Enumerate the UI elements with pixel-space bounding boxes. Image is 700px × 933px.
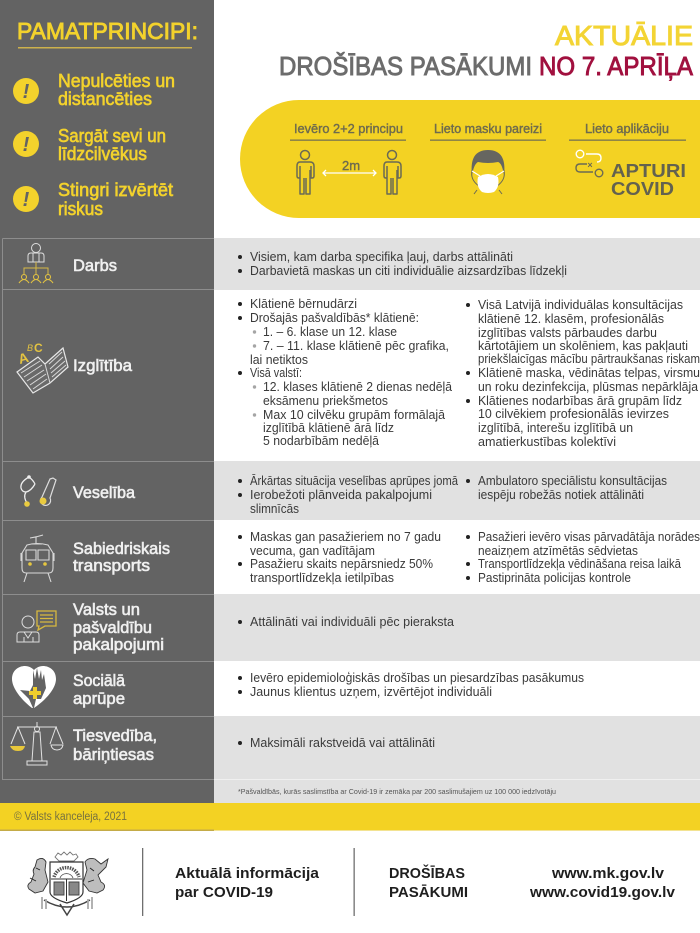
- heading: pamatprincipi: PAMATPRINCIPI:: [17, 18, 198, 44]
- row: izglitiba: lai netiktos: [250, 352, 308, 367]
- principle 1: distancēties: [58, 89, 152, 109]
- text: current information: Aktuālā informācija: [175, 865, 320, 882]
- principle 1: [13, 71, 175, 109]
- row: sabiedriskais transports: transports: [73, 557, 150, 575]
- principle 1: Nepulcēties un: [58, 71, 175, 91]
- rule: mask: [430, 122, 546, 194]
- title: [279, 20, 693, 81]
- text: safety measures: DROŠĪBAS: [389, 864, 465, 882]
- row: izglitiba: eksāmenu priekšmetos: [263, 393, 388, 408]
- row: sociala aprupe: [12, 666, 584, 708]
- principle 3: Stingri izvērtēt: [58, 180, 173, 200]
- row: valsts un pasvaldibu pakalpojumi: Attālināti vai individuāli pēc pieraksta: [250, 614, 455, 629]
- row: sabiedriskais transports: Maskas gan pasažieriem no 7 gadu: [250, 529, 441, 544]
- rule: 2+2: Ievēro 2+2 principu: [294, 122, 403, 136]
- row: izglitiba: Drošajās pašvaldībās* klātienē:: [250, 310, 419, 325]
- row: sabiedriskais transports: Sabiedriskais: [73, 540, 170, 558]
- yellow copyright band: © Valsts kanceleja, 2021: [14, 811, 127, 823]
- row: sociala aprupe: Jaunus klientus uzņem, izvērtējot individuāli: [250, 684, 492, 699]
- row: izglitiba: Klātienes nodarbības ārā grupām līdz: [478, 393, 682, 408]
- row: sabiedriskais transports: Pasažieru skaits nepārsniedz 50%: [250, 556, 433, 571]
- footer: [28, 848, 676, 916]
- icon: heart with hand: [12, 666, 56, 708]
- title: DROŠĪBAS PASĀKUMI: [279, 52, 532, 81]
- row: sabiedriskais transports: transportlīdzekļa ietilpības: [250, 570, 394, 585]
- icon: coat of arms of Latvia: [28, 852, 108, 915]
- row: darbs: Visiem, kam darba specifika ļauj, darbs attālināti: [250, 249, 513, 264]
- row: veseliba: Ārkārtas situācija veselības aprūpes jomā: [250, 473, 459, 488]
- table grid lines: [2, 238, 700, 780]
- rule: 2+2: [290, 122, 406, 194]
- row: darbs: Darbs: [73, 257, 117, 275]
- principle 2: [13, 126, 166, 164]
- row: tiesvediba, barintiesas: Tiesvedība,: [73, 727, 157, 745]
- divider: [354, 848, 355, 916]
- row: tiesvediba, barintiesas: [10, 722, 435, 765]
- icon: scales: [10, 722, 63, 765]
- row: sociala aprupe: Sociālā: [73, 672, 126, 690]
- panel: yellow pill with rules: [240, 100, 700, 218]
- icon: person left: [297, 150, 314, 194]
- underline: [18, 47, 192, 48]
- row: izglitiba: 10 cilvēkiem profesionālās ievirzes: [478, 406, 669, 421]
- principle 3: riskus: [58, 199, 103, 219]
- row: darbs: [19, 244, 567, 283]
- title: AKTUĀLIE: [555, 20, 693, 51]
- row: veseliba: slimnīcās: [250, 501, 299, 516]
- icon: person with speech bubble: [17, 611, 56, 642]
- icon: open book: A: [16, 349, 30, 367]
- icon: apturi covid route: ×: [587, 160, 593, 170]
- row: darbs: Darbavietā maskas un citi individuālie aizsardzības līdzekļi: [250, 263, 567, 278]
- rule: app: Lieto aplikāciju: [585, 122, 669, 136]
- principle 2: !: [23, 134, 30, 156]
- logo text: apturi covid: APTURI: [611, 161, 686, 181]
- row: sociala aprupe: Ievēro epidemioloģiskās drošības un piesardzības pasākumus: [250, 670, 584, 685]
- row: izglitiba: Visā valstī:: [250, 365, 302, 380]
- text: websites: www.mk.gov.lv: [551, 865, 665, 882]
- row: tiesvediba, barintiesas: Maksimāli rakstveidā vai attālināti: [250, 735, 435, 750]
- row: valsts un pasvaldibu pakalpojumi: pašvaldību: [73, 619, 152, 637]
- row: valsts un pasvaldibu pakalpojumi: Valsts un: [73, 601, 140, 619]
- row: sabiedriskais transports: Pastiprināta policijas kontrole: [478, 570, 631, 585]
- row: sociala aprupe: aprūpe: [73, 690, 125, 708]
- logo text: apturi covid: [611, 161, 686, 199]
- principle 3: [13, 180, 173, 219]
- yellow copyright band: [0, 803, 700, 831]
- right row backgrounds: [214, 238, 700, 803]
- row: izglitiba: Klātienē bērnudārzi: [250, 296, 357, 311]
- row: izglitiba: Izglītība: [73, 357, 133, 375]
- text: safety measures: [389, 864, 468, 901]
- row: valsts un pasvaldibu pakalpojumi: [17, 601, 455, 654]
- row: veseliba: [21, 473, 667, 516]
- row: sabiedriskais transports: vecuma, gan vadītājam: [250, 543, 375, 558]
- icon: tram: [21, 535, 54, 582]
- row: izglitiba: amatierkustības kolektīvi: [478, 434, 616, 449]
- icon: stethoscope and thermometer: [21, 475, 56, 507]
- row: izglitiba: 7. – 11. klase klātienē pēc grafika,: [263, 338, 449, 353]
- icon: open book: C: [34, 341, 43, 355]
- row: izglitiba: klātienē 12. klasēm, profesionālās: [478, 311, 664, 326]
- row: izglitiba: kārtotājiem un skolēniem, kas pakļauti: [478, 338, 688, 353]
- principle 3: !: [23, 189, 30, 211]
- row: izglitiba: 5 nodarbībām nedēļā: [263, 433, 380, 448]
- icon: open book: B: [27, 343, 33, 353]
- text: current information: par COVID-19: [175, 884, 273, 901]
- footnote: *Pašvaldībās, kurās saslimstība ar Covid-19 ir zemāka par 200 saslimušajiem uz 100 000 iedzīvotāju: [238, 787, 556, 796]
- row: veseliba: Veselība: [73, 484, 136, 502]
- row: sabiedriskais transports: neaizņem atzīmētās sēdvietas: [478, 543, 638, 558]
- panel: key principles: [13, 18, 198, 219]
- row: veseliba: iespēju robežās notiek attālināti: [478, 487, 644, 502]
- row: sabiedriskais transports: [21, 529, 700, 585]
- rule: mask: Lieto masku pareizi: [434, 122, 542, 136]
- icon: person right: [384, 150, 401, 194]
- icon: open book: [16, 341, 68, 393]
- text: websites: [529, 865, 676, 901]
- divider: [142, 848, 143, 916]
- text: websites: www.covid19.gov.lv: [529, 884, 676, 901]
- logo text: apturi covid: COVID: [611, 179, 674, 199]
- row: izglitiba: izglītībā klātienē ārā līdz: [263, 420, 394, 435]
- row: izglitiba: 12. klases klātienē 2 dienas nedēļā: [263, 379, 453, 394]
- rule: app: [569, 122, 686, 199]
- row: izglitiba: izglītības valsts pārbaudes darbu: [478, 325, 657, 340]
- principle 1: !: [23, 81, 30, 103]
- icon: org chart: [19, 244, 53, 283]
- row: tiesvediba, barintiesas: bāriņtiesas: [73, 746, 154, 764]
- principle 2: Sargāt sevi un: [58, 126, 166, 146]
- row: izglitiba: izglītībā, interešu izglītībā un: [478, 420, 633, 435]
- row: valsts un pasvaldibu pakalpojumi: pakalpojumi: [73, 636, 164, 654]
- panel: left grey column: [0, 0, 214, 803]
- principle 2: līdzcilvēkus: [58, 144, 147, 164]
- row: izglitiba: Visā Latvijā individuālas konsultācijas: [478, 297, 683, 312]
- arrow: 2 metres: 2m: [342, 158, 360, 173]
- row: izglitiba: Max 10 cilvēku grupām formālajā: [263, 407, 446, 422]
- row: izglitiba: 1. – 6. klase un 12. klase: [263, 324, 397, 339]
- text: safety measures: PASĀKUMI: [389, 884, 468, 901]
- row: veseliba: Ierobežoti plānveida pakalpojumi: [250, 487, 432, 502]
- row: veseliba: Ambulatoro speciālistu konsultācijas: [478, 473, 667, 488]
- text: current information: [175, 865, 320, 901]
- row: izglitiba: [16, 296, 700, 449]
- title: NO 7. APRĪĻA: [539, 53, 693, 81]
- icon: face with mask: [472, 150, 504, 194]
